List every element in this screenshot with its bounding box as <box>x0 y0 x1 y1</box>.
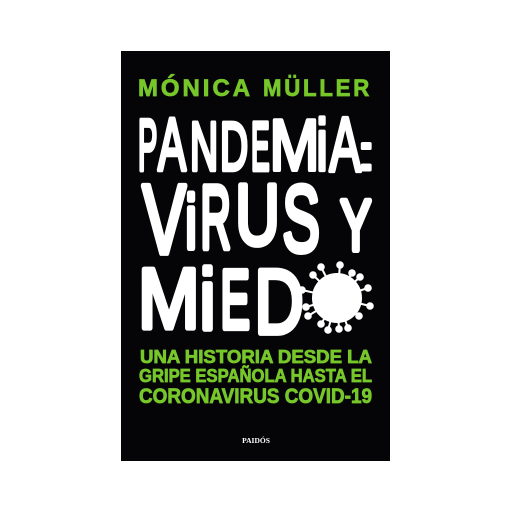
title line: Virus y: Y <box>340 186 371 265</box>
title line: Pandemia: i <box>316 106 328 186</box>
subtitle: CORONAVIRUS COVID-19 <box>139 385 372 408</box>
subtitle: UNA HISTORIA DESDE LA <box>140 347 372 367</box>
title line: Virus y <box>142 166 371 274</box>
word: Mied: i <box>200 254 215 348</box>
word: Mied <box>138 251 304 353</box>
title line: Pandemia <box>138 101 376 188</box>
icon: virus <box>299 262 373 333</box>
title line: Virus y: S <box>282 167 320 272</box>
title line: Pandemia: : <box>356 125 376 181</box>
author name: MÜLLER <box>263 75 372 102</box>
word: Mied: M <box>138 251 200 346</box>
title line: Pandemia: D <box>220 107 248 185</box>
title line: Virus y: i <box>186 180 197 264</box>
title line: Pandemia: E <box>251 108 270 186</box>
word: Mied: D <box>254 251 304 353</box>
subtitle: GRIPE ESPAÑOLA HASTA EL <box>139 365 372 386</box>
author name <box>138 74 372 102</box>
title line: Pandemia: P <box>138 104 157 186</box>
title line: Miedo with virus as the O <box>138 251 373 353</box>
cover panel <box>121 51 390 461</box>
title line: Pandemia: M <box>270 106 319 186</box>
title line: Virus y: R <box>200 167 231 267</box>
publisher: PAIDÓS <box>242 435 270 445</box>
title line: Pandemia: A <box>158 104 186 186</box>
title line: Virus y: U <box>236 167 280 262</box>
author name: MÓNICA <box>138 74 253 102</box>
title line: Virus y: V <box>142 166 186 274</box>
title line: Pandemia: A <box>330 101 361 188</box>
subtitle <box>139 347 372 408</box>
title line: Pandemia: N <box>190 107 218 185</box>
word: Mied: E <box>220 254 250 347</box>
